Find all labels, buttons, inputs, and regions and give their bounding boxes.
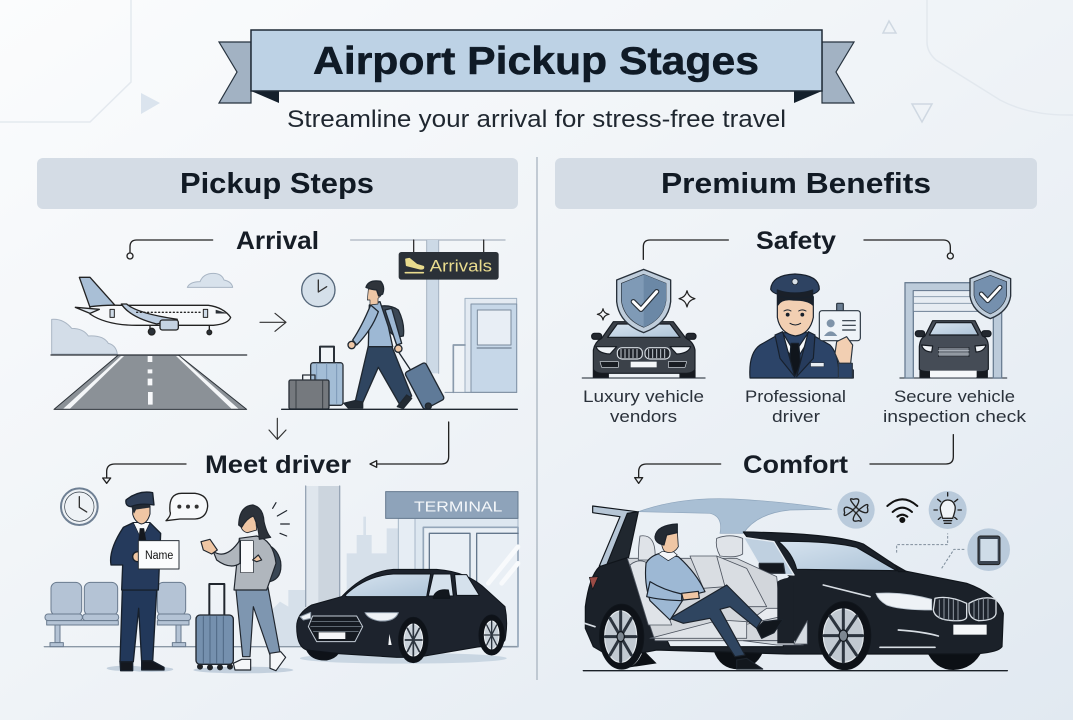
walking passenger: [344, 281, 445, 410]
heading: Safety: Safety: [756, 227, 836, 255]
luxury car: [582, 322, 705, 378]
cabin seats: [627, 536, 807, 645]
arrow right: [260, 313, 286, 331]
connector: safety left: [643, 240, 728, 259]
floor line: [44, 645, 517, 649]
terminal pillar: [305, 486, 340, 607]
terminal structure: [351, 240, 517, 392]
shield: inspection: [970, 271, 1011, 319]
label: Luxury vehicle vendors: vendors: [610, 407, 677, 426]
panel header: Pickup Steps: Pickup Steps: [180, 168, 374, 200]
passenger: [645, 524, 783, 669]
black sedan: [297, 569, 507, 664]
icon: lightbulb: [929, 491, 967, 529]
label: Secure vehicle inspection check: Secure vehicle: [894, 387, 1015, 406]
woman traveller: [201, 503, 289, 671]
arrivals sign: Arrivals: [430, 257, 492, 276]
icon: wifi: [887, 499, 917, 522]
connector: arrival: [127, 240, 213, 259]
connector: comfort right: [870, 435, 953, 464]
terminal building: [386, 492, 518, 647]
suitcase: [193, 584, 293, 673]
connector: comfort left: [635, 464, 721, 483]
rear wheel: [600, 604, 644, 669]
airplane: [75, 277, 231, 335]
underside wheels: [623, 650, 983, 670]
connector: safety right: [864, 240, 953, 259]
chauffeur: [107, 492, 173, 672]
name sign: [138, 541, 179, 569]
sparkles: [597, 291, 695, 320]
id badge: [819, 303, 860, 378]
label: Professional driver: Professional: [745, 387, 846, 406]
heading: Meet driver: Meet driver: [205, 451, 351, 479]
wall clock: [61, 488, 98, 525]
cloud: small: [187, 273, 233, 287]
shield: luxury: [617, 269, 671, 333]
waiting chairs: [45, 582, 191, 647]
heading: Arrival: Arrival: [236, 227, 319, 255]
connector: from arrival to meet driver right: [370, 422, 449, 467]
panel header: Premium Benefits: [555, 158, 1037, 209]
title banner: [219, 30, 854, 103]
label: Secure vehicle inspection check: [883, 387, 1027, 426]
inspection car: [915, 321, 991, 377]
car body: [585, 532, 1003, 658]
label: Professional driver: [745, 387, 846, 426]
arrival scene: [51, 240, 517, 439]
city skyline: [272, 517, 398, 647]
speech bubble: [166, 493, 208, 521]
comfort scene: [583, 435, 1010, 671]
ground line: [282, 407, 517, 411]
front wheel: [819, 602, 871, 670]
title: Airport Pickup Stages: [313, 40, 759, 83]
comfort icons: [837, 491, 1010, 571]
connector: meet driver left: [103, 464, 186, 483]
terminal building: TERMINAL: [414, 498, 502, 515]
name sign: Name: [145, 548, 173, 562]
label: Luxury vehicle vendors: Luxury vehicle: [583, 387, 704, 406]
label: Professional driver: driver: [772, 407, 820, 426]
hatch door: [593, 506, 637, 567]
inspection garage: [900, 283, 1007, 378]
icon: tablet: [967, 528, 1010, 571]
label: Secure vehicle inspection check: inspection check: [883, 407, 1027, 426]
heading: Comfort: Comfort: [743, 451, 849, 479]
luxury suv: [585, 506, 1003, 670]
arrow down: [269, 418, 286, 439]
runway: [51, 355, 247, 409]
icon: fan: [837, 491, 875, 529]
cloud: left: [52, 319, 117, 354]
label: Luxury vehicle vendors: [583, 387, 704, 426]
meet driver scene: [44, 422, 518, 673]
safety row: [582, 240, 1011, 378]
professional driver: [750, 274, 853, 378]
ground line: [583, 669, 1007, 673]
subtitle: Streamline your arrival for stress-free travel: [287, 106, 786, 133]
canopy: [638, 499, 832, 533]
panel header: Premium Benefits: Premium Benefits: [661, 168, 931, 200]
luggage: [289, 347, 343, 409]
clock: [302, 273, 335, 307]
arrivals sign: [399, 240, 499, 280]
panel header: Pickup Steps: [37, 158, 518, 209]
